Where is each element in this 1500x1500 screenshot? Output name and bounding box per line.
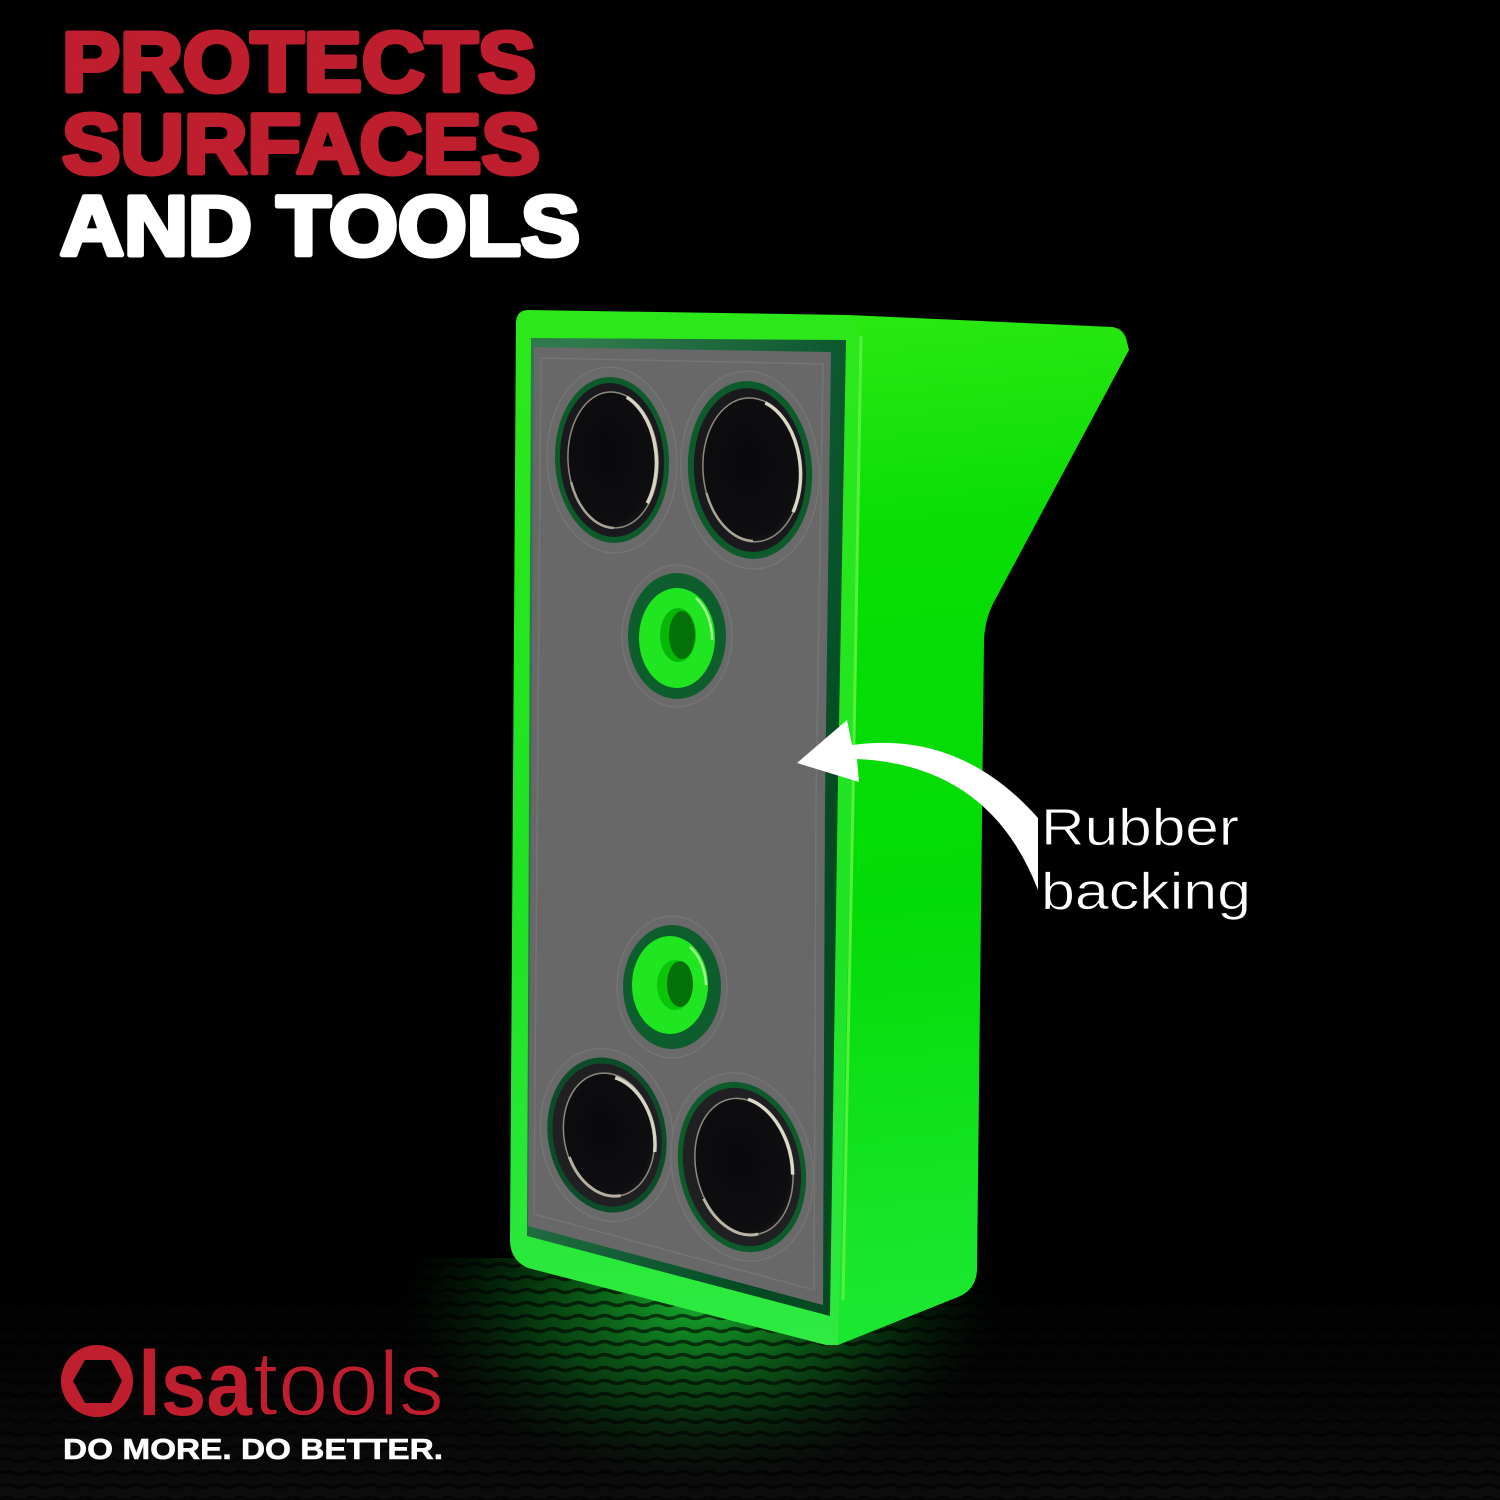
edge highlight	[843, 336, 861, 1300]
embossed pad border	[534, 358, 823, 1290]
front frame of holder	[510, 310, 862, 1345]
top right magnet	[674, 366, 826, 574]
top left magnet	[542, 364, 682, 556]
wordmark bold part: lsa	[138, 1333, 253, 1435]
wordmark light part: tools	[253, 1333, 444, 1435]
side face of holder	[800, 315, 1129, 1345]
bottom right magnet	[654, 1060, 830, 1274]
title line 1: PROTECTS	[62, 15, 536, 109]
brand logo	[61, 1333, 444, 1435]
icon: hex socket O	[61, 1345, 133, 1417]
rubber backing pad	[528, 347, 831, 1305]
callout label: rubber backing: backing	[1041, 863, 1251, 921]
callout arrow	[797, 720, 1038, 890]
title line 3: AND TOOLS	[60, 179, 580, 273]
brand tagline: DO MORE. DO BETTER.	[63, 1434, 443, 1466]
recess dark green	[527, 338, 846, 1316]
title line 2: SURFACES	[62, 97, 540, 191]
title	[60, 15, 580, 273]
lower green grommet	[617, 916, 727, 1058]
product: green magnetic holder	[510, 310, 1129, 1345]
callout label: rubber backing: Rubber	[1041, 799, 1239, 857]
bottom left magnet	[527, 1038, 687, 1232]
upper green grommet	[622, 565, 732, 707]
